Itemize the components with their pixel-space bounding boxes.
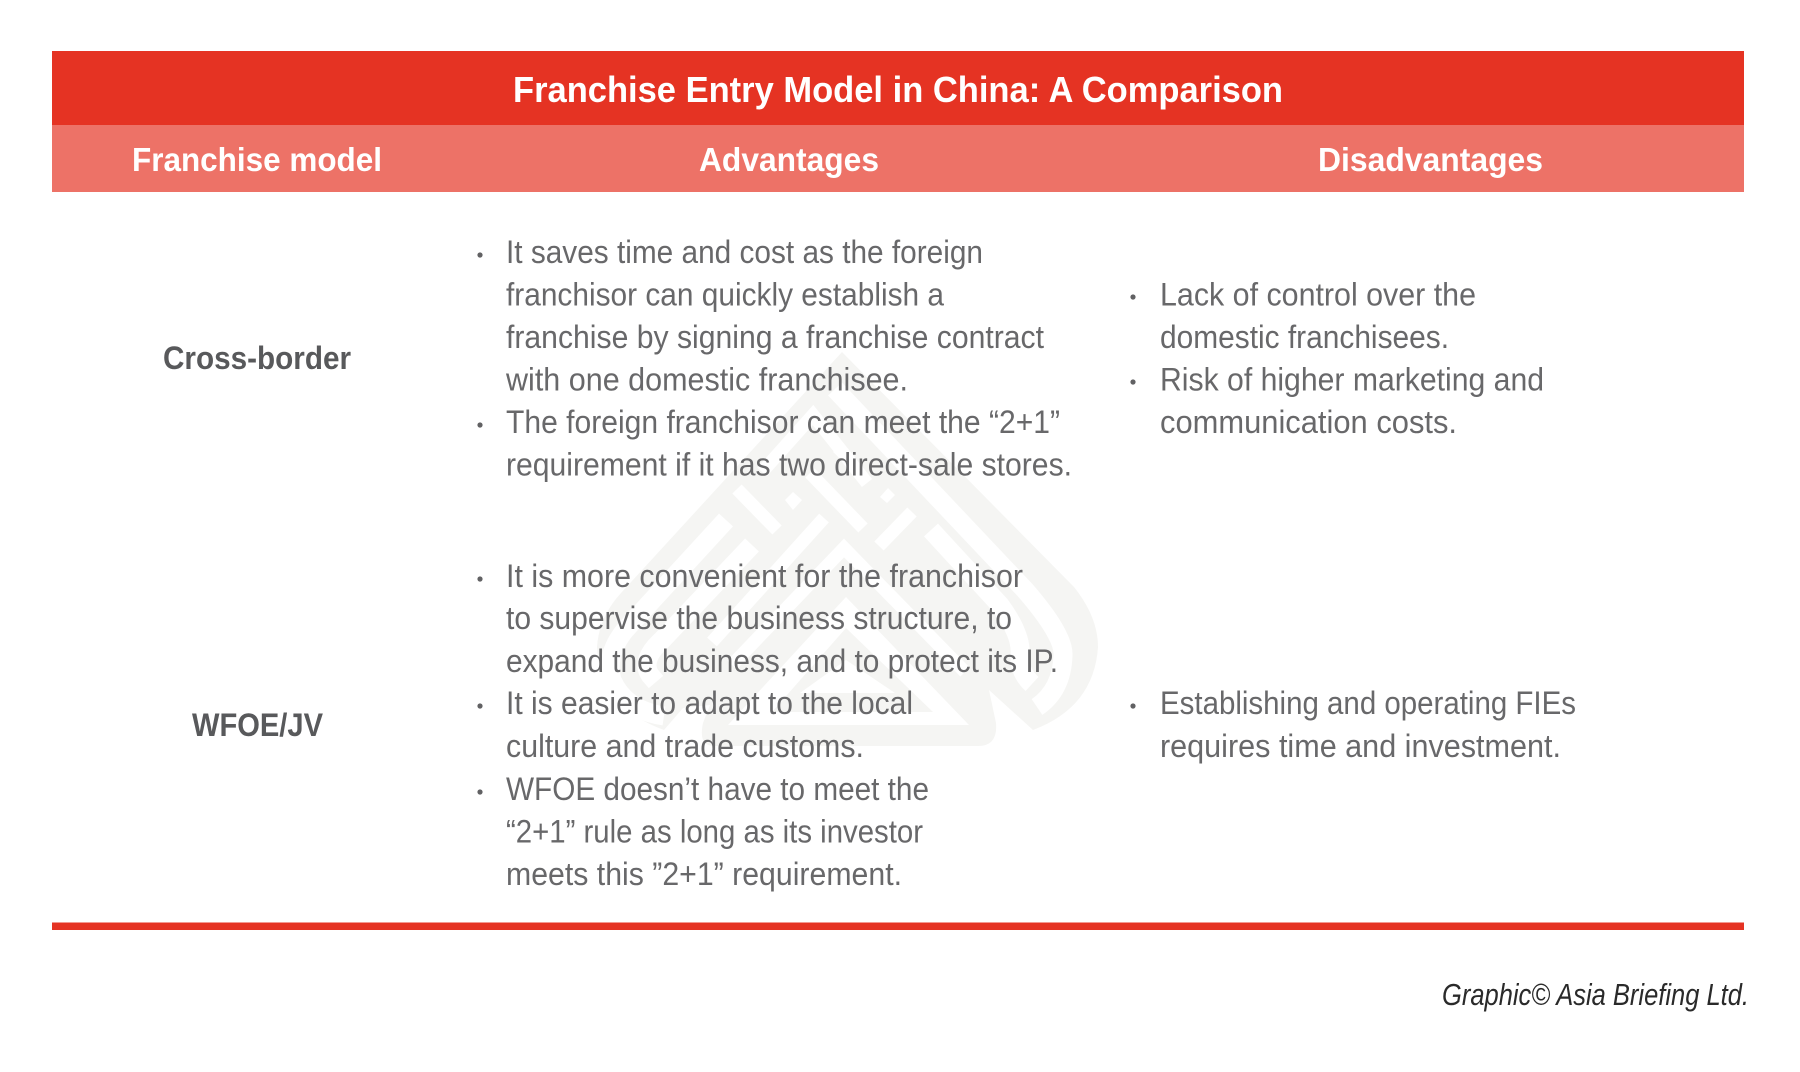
disadvantages: cross-border: Lack of control over the xyxy=(1160,276,1476,312)
disadvantages: cross-border xyxy=(1130,276,1544,440)
disadvantages: cross-border: communication costs. xyxy=(1160,404,1457,440)
advantages: WFOE/JV: culture and trade customs. xyxy=(506,728,864,764)
advantages: WFOE/JV xyxy=(477,558,1058,892)
bottom rule xyxy=(52,922,1744,930)
advantages: cross-border: requirement if it has two direct-sale stores. xyxy=(506,446,1072,482)
advantages: WFOE/JV: It is more convenient for the franchisor xyxy=(506,558,1023,594)
column heading: franchise model: Franchise model xyxy=(132,141,382,178)
column header row xyxy=(52,125,1744,192)
advantages: cross-border: The foreign franchisor can meet the “2+1” xyxy=(506,404,1060,440)
advantages: WFOE/JV: WFOE doesn’t have to meet the xyxy=(506,771,929,807)
advantages: cross-border xyxy=(477,234,1072,482)
advantages: cross-border: It saves time and cost as the foreign xyxy=(506,234,983,270)
row label: WFOE/JV: WFOE/JV xyxy=(192,707,324,743)
column heading: advantages: Advantages xyxy=(699,141,879,178)
disadvantages: WFOE/JV xyxy=(1130,685,1576,764)
advantages: cross-border: franchisor can quickly establish a xyxy=(506,276,944,312)
advantages: WFOE/JV: meets this ”2+1” requirement. xyxy=(506,856,902,892)
icon: watermark logo xyxy=(597,352,1098,746)
disadvantages: WFOE/JV: Establishing and operating FIEs xyxy=(1160,685,1576,721)
title banner: Franchise Entry Model in China: A Comparison xyxy=(513,69,1283,110)
advantages: WFOE/JV: expand the business, and to protect its IP. xyxy=(506,643,1058,679)
disadvantages: cross-border: Risk of higher marketing and xyxy=(1160,362,1544,398)
column heading: disadvantages: Disadvantages xyxy=(1318,141,1543,178)
advantages: cross-border: franchise by signing a franchise contract xyxy=(506,319,1044,355)
advantages: WFOE/JV: to supervise the business structure, to xyxy=(506,600,1012,636)
advantages: cross-border: with one domestic franchisee. xyxy=(505,362,908,398)
disadvantages: WFOE/JV: requires time and investment. xyxy=(1160,728,1561,764)
disadvantages: cross-border: domestic franchisees. xyxy=(1160,319,1449,355)
row label: cross-border: Cross-border xyxy=(163,340,351,376)
title banner xyxy=(52,51,1744,125)
advantages: WFOE/JV: It is easier to adapt to the local xyxy=(506,685,913,721)
advantages: WFOE/JV: “2+1” rule as long as its investor xyxy=(506,814,923,850)
